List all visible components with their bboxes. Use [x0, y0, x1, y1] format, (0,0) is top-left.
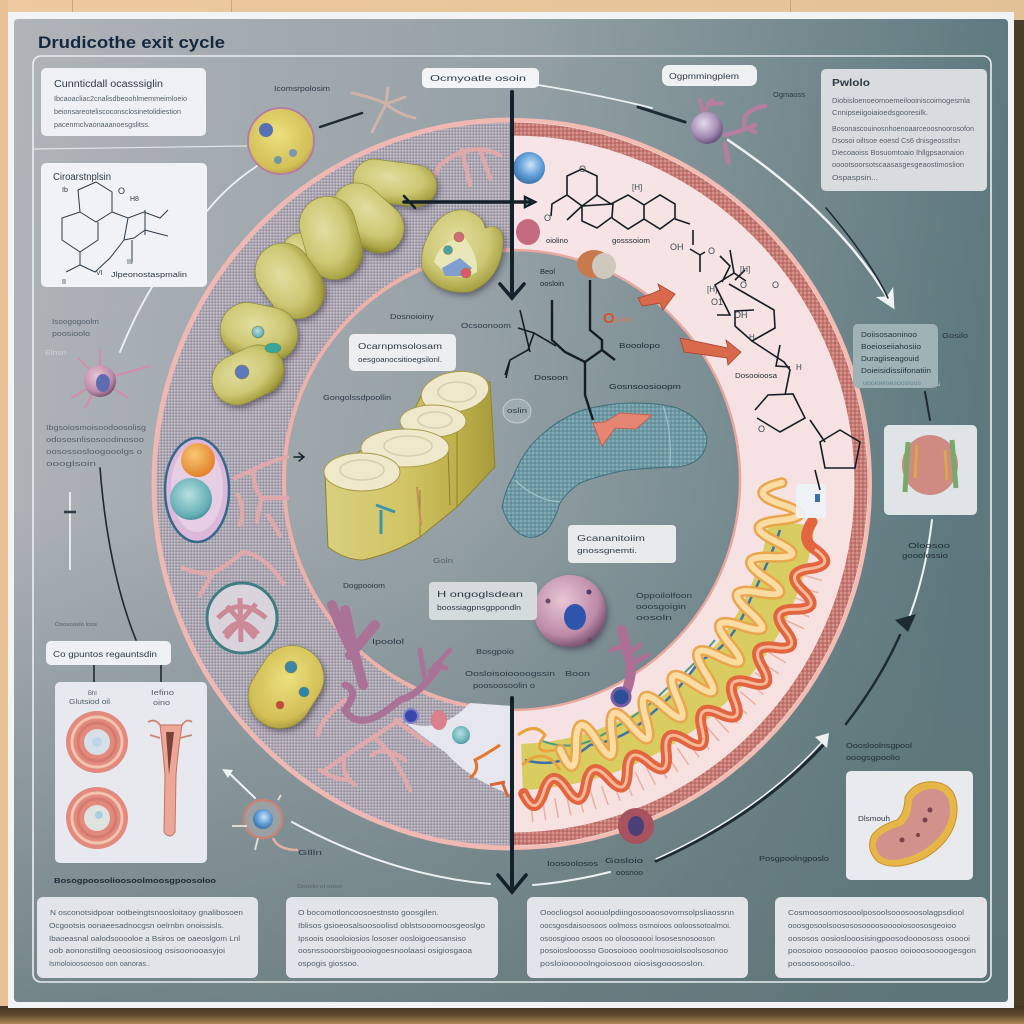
floating labels: Ipoolol	[372, 639, 405, 646]
text box: lower left-centre note: boossiagpnsgppondln	[437, 605, 521, 612]
text box: top left note: beionsareoteliscoconsclosinetolidiestion	[54, 109, 181, 116]
text box: right side panel: Duragiiseagouid	[861, 356, 919, 363]
blue and green streaks	[525, 530, 780, 763]
bottom text box 2: Ipsoois osooloiosios lososer oosloigoeosansiso	[298, 936, 466, 943]
text box: lower left title: Co gpuntos regauntsdin	[53, 650, 157, 659]
text box: lower left-centre note	[429, 582, 537, 620]
benzene ring diagram: II	[62, 279, 66, 286]
organelle: top potato	[350, 156, 440, 210]
panel: stomach: Dlsmouh	[858, 816, 890, 823]
floating labels: Gosloio	[605, 858, 643, 865]
organelle: tall potato	[293, 190, 369, 286]
structure atom labels: O	[708, 246, 715, 256]
floating labels: Icomsrpolosim	[274, 86, 330, 93]
text box: lower left title	[46, 641, 171, 665]
bottom text box 2: ospogis giossoo.	[298, 961, 359, 968]
yellow layered cylinders	[324, 366, 495, 560]
text box: top right panel	[821, 69, 987, 191]
inner orange fold	[560, 483, 799, 767]
chemical structure: right ring	[544, 164, 860, 490]
floating labels: Oloosoo	[908, 543, 950, 550]
purple cell sphere with blue nucleus	[534, 575, 606, 647]
purple neuron, lower left of ring	[332, 605, 450, 723]
floating labels: Dogpooiom	[343, 583, 385, 590]
icon: uterine tube	[148, 721, 192, 836]
floating labels: oooglsoin	[46, 461, 96, 468]
floating labels: Ogmaoss	[773, 92, 806, 99]
structure atom labels	[544, 164, 802, 434]
floating labels: Oosloisoioooogssin	[465, 671, 555, 678]
cylinder top: second	[361, 429, 449, 467]
teal kidney organ	[502, 403, 707, 537]
bottom text box 3: posloiooooolngoiosooo oiosisgooososlon.	[540, 961, 705, 968]
bottom text box 2: O bocomotloncoosoestnsto goosgilen.	[298, 910, 439, 917]
text box: top left note: Cunnticdall ocasssiglin	[54, 79, 163, 90]
organelle: mid potato	[244, 232, 336, 330]
panel: ring cross sections and tube: Iefino	[151, 690, 174, 697]
small pale tube at wave top	[796, 484, 826, 518]
organelle: small potato	[277, 227, 331, 287]
fringe behind folds	[530, 565, 816, 812]
bottom text box 1: Ismoloioosoosoo oon oanoras..	[49, 961, 150, 968]
floating labels: Goln	[433, 558, 453, 565]
text box: centre small note	[349, 334, 456, 371]
floating labels: poosioolo	[52, 331, 90, 338]
benzene ring diagram: Ib	[62, 187, 68, 194]
text box: top right panel: Pwlolo	[832, 78, 870, 89]
organelle: lower potato	[236, 634, 336, 740]
bottom text box 4: oososos oosioslooosisingpoosodoooososs osoooi	[788, 936, 971, 943]
bottom text box 3: posoioslooosso Goosoiooo ooolmosoiolsoolsosonoo	[540, 948, 728, 955]
purple neuron top right	[691, 100, 765, 162]
oval cell with orange and teal nuclei	[165, 438, 229, 542]
curved flow arrows	[100, 85, 932, 885]
cylinder inclusions	[376, 505, 395, 534]
bottom text box 3: Ooocliogsol aoouolpdiingosooaosovomsolpsliaossnn	[540, 910, 734, 917]
floating labels: Bosogpoosolioosoolmoosgpoosoloo	[54, 878, 216, 885]
arrow: to stomach label	[656, 742, 826, 861]
copper arrow lower	[680, 338, 741, 365]
cylinder top: back	[418, 366, 492, 418]
small side label: Gosilo	[942, 333, 968, 340]
organelle: potato with teal dot	[215, 297, 303, 367]
floating labels: Posgpoolngposlo	[759, 856, 829, 863]
pill: top centre: Ocmyoatle osoin	[430, 74, 526, 83]
text box: top right panel: Ospaspsin...	[832, 175, 878, 182]
text box: chemical structure: Jlpeonostaspmalin	[111, 272, 187, 279]
floating labels: ooogsgpoolio	[846, 755, 900, 762]
floating labels: oosossosloogooolgs o	[46, 449, 142, 456]
structure atom labels: [H]	[632, 183, 642, 192]
bottom text box 4: poosoioo oosooooioo paosoo ooiooosoooogesgon	[788, 948, 976, 955]
text box: lower centre note: Gcananitoiim	[577, 534, 645, 543]
floating labels: Dooslo ol oooo	[297, 884, 342, 890]
arrow: down bottom	[498, 698, 526, 892]
floating labels: Beol	[540, 269, 555, 276]
text box: chemical structure: Ciroarstnplsin	[53, 172, 111, 183]
structure atom labels: O	[772, 280, 779, 290]
bottom text box 4: posoosooosoiloo..	[788, 961, 855, 968]
floating labels: Gllln	[298, 850, 322, 857]
structure atom labels: O	[544, 213, 551, 223]
floating labels: Ocsoonoom	[461, 323, 511, 330]
arrow: kidney down	[905, 520, 932, 628]
floating labels: Isoogogoolm	[52, 319, 99, 326]
panel: ring cross sections and tube: oino	[153, 700, 170, 707]
pink cell cluster at centre top	[516, 219, 540, 245]
floating labels: oiolino	[546, 238, 568, 245]
floating labels: Elnsn	[45, 350, 66, 357]
floating labels: Ibgsoiosmoisoodoosolisg	[46, 425, 146, 432]
copper plug	[577, 250, 616, 279]
icon: ring cross section top	[66, 711, 128, 773]
structure atom labels: H	[796, 363, 802, 372]
blue sphere at top of ring	[513, 152, 545, 184]
structure atom labels: OH	[734, 310, 748, 320]
benzene ring diagram: VI	[96, 270, 103, 277]
text box: top right panel: Diecoaoiss Bosuomtoaio Ihllgpsaonaion	[832, 150, 964, 157]
arrow: neuron to side panel	[728, 140, 892, 305]
floating labels: oslin	[507, 408, 527, 415]
small label bubble	[503, 399, 531, 423]
floating labels: Ososooslo loos	[55, 622, 97, 628]
text box: top left note: Ibcaoacliac2cnalisdbeoohlmemmeimloeio	[54, 96, 187, 103]
benzene ring diagram: O	[118, 186, 125, 196]
pill: top right: Ogpmmingplem	[669, 72, 739, 81]
arrow: bottom left sweep	[292, 822, 490, 884]
bottom text box 1: oob aononstillng oeoosiosioog osisoonooasyjoi	[49, 948, 226, 955]
benzene ring diagram: H8	[130, 196, 139, 203]
organelle: cut potato with inclusions	[422, 210, 503, 292]
arrow: left vertical	[100, 468, 136, 640]
arrow: down to stomach	[846, 635, 900, 724]
bottom text box 2: Iblisos gsioeosalsoosoolisd oblstsooomoosgeoslgo	[298, 923, 485, 930]
structure atom labels: [H]	[707, 285, 717, 294]
floating labels	[45, 86, 950, 890]
yellow olive organelle chain	[204, 156, 503, 740]
panel: stomach	[846, 771, 973, 880]
bottom text box 1: Ibaoeasnal oalodsooooloe a Bsiros oe oaeoslgom Lnl	[49, 936, 240, 943]
structure atom labels: H	[749, 333, 755, 342]
structure atom labels: O	[758, 424, 765, 434]
text box: lower left-centre note: H ongoglsdean	[437, 590, 523, 599]
chemical structure: centre	[505, 280, 632, 420]
circular cycle ring	[154, 120, 870, 848]
copper arrows	[638, 284, 741, 365]
text box: centre small note: Ocarnpmsolosam	[358, 342, 442, 351]
rim cell bottom	[618, 808, 654, 844]
bottom text box 3: oocsgosdaisoosoos oolmoss osmoioos ooloossotoalmoi.	[540, 923, 731, 930]
text box: top left note	[41, 68, 206, 136]
icon: ring cross section bottom	[66, 787, 128, 849]
title: Drudicothe exit cycle	[38, 34, 225, 52]
floating labels: gooolossio	[902, 553, 948, 560]
structure atom labels: OH	[670, 242, 684, 252]
copper arrow upper	[638, 284, 675, 310]
ochre round cell	[248, 108, 314, 174]
arrow: panel to kidney	[925, 392, 930, 420]
pink star neuron left	[72, 350, 150, 408]
floating labels: Oppoilolfoon	[636, 593, 692, 600]
arrow: pill to neuron	[538, 85, 652, 108]
floating labels: poosoosoolin o	[473, 683, 535, 690]
chemical structure: centre: guan	[614, 315, 632, 324]
text box: right side panel	[853, 324, 940, 388]
arrow: small mark at inner ring	[294, 453, 304, 461]
structure atom labels: [H]	[740, 265, 750, 274]
intestinal folds on right ring	[518, 483, 825, 812]
cylinder top: front	[324, 453, 400, 491]
orange twisted ribbon on kidney	[593, 413, 652, 446]
yellow mucosa band	[522, 523, 792, 767]
bottom text box 3: osoosgiooo osoos oo oloosooooi lososesnosooson	[540, 936, 715, 943]
ring left half: stippled tissue	[152, 118, 510, 850]
text box: top right panel: Dsosoi oiltsoe eoesd Cs6 dnisgeosstlsn	[832, 138, 960, 145]
organelle: kidney potato	[322, 173, 414, 263]
structure atom labels: O1	[711, 297, 723, 307]
benzene ring diagram	[62, 182, 168, 286]
floating labels: odososnlisosoodinosoo	[46, 437, 144, 444]
floating labels: Ooosloolnsgpool	[846, 743, 913, 750]
arrow: down top	[500, 92, 524, 298]
bottom text box 2: oosnssooorsbigoooiogoesnoolaasi osigiosgaoa	[298, 948, 472, 955]
floating labels: Gosnsoosioopm	[609, 384, 681, 391]
panel: ring cross sections and tube: Bhl	[88, 691, 97, 697]
pale patch with floating cells	[405, 703, 512, 797]
floating labels: oosloin	[540, 281, 564, 288]
arrow: horizontal	[404, 196, 535, 208]
text box: top right panel: ooootsoorsotscaasasgesgeaostimoslion	[832, 162, 964, 169]
text box: centre small note: oesgoanocsitioegsilonl.	[358, 357, 442, 364]
benzene ring diagram: III	[127, 259, 133, 266]
text box: right side panel: Doiisosaoninoo	[861, 332, 917, 339]
main black arrows	[294, 92, 535, 892]
slider glyph left	[64, 492, 76, 570]
text box: top right panel: Diobisloenoeomoemeilooiniscoimogesmla	[832, 98, 970, 105]
text box: lower centre note: gnossgnemti.	[577, 548, 637, 555]
cylinder top: middle	[400, 405, 466, 437]
kidney diagram panel	[884, 425, 977, 515]
text box: chemical structure	[41, 163, 207, 287]
arrow: to left panel	[228, 772, 255, 798]
text box: top right panel: Bosonascouinosnhoenoaarceoosnoorosofon	[832, 126, 974, 133]
floating labels: Dosoon	[534, 375, 568, 382]
bottom text box 3	[527, 897, 748, 978]
floating labels: Booolopo	[619, 343, 660, 350]
text box: right side panel: uooioeioesoosioos	[863, 381, 921, 387]
orange oxygen label: O	[603, 310, 615, 327]
floating labels: Ioosoolosos	[547, 861, 599, 868]
text box: top left note: pacenrnclvaonaaanoesgslitss.	[54, 122, 150, 129]
structure atom labels: O	[579, 164, 586, 174]
panel: ring cross sections and tube: Glutsiod oil	[69, 699, 111, 706]
floating labels: Bosgpoio	[476, 649, 514, 656]
pink branching vessels, left ring	[183, 149, 500, 790]
connector stems	[94, 665, 161, 682]
cylinder body	[325, 382, 495, 560]
pill: top right	[662, 65, 757, 86]
text box: top right panel: Cnnipseiigoiaioedsgooresilk.	[832, 110, 928, 117]
bottom text box 4: ooosgosoolsoosososoooosooooiosoososgeoioo	[788, 923, 956, 930]
floating labels: oosnoo	[616, 870, 643, 877]
pale star neuron top	[352, 88, 415, 132]
bottom text box 1: Ocgootsis oonaeesadnocgsn oelrnbn onoissisls.	[49, 923, 224, 930]
pill: top centre	[422, 68, 539, 88]
floating labels: Dosnoioiny	[390, 314, 435, 321]
floating labels: Boon	[565, 671, 590, 678]
organelle: potato with blue dot	[204, 337, 292, 413]
structure atom labels: O	[740, 280, 747, 290]
floating labels: Dosooioosa	[735, 373, 777, 380]
bottom text box 2	[286, 897, 498, 978]
bottom text box 1	[37, 897, 258, 978]
knotted fold left end	[518, 728, 560, 770]
bottom text box 4: Cosmoosoomosooolposoolsooosoosolagpsdiool	[788, 910, 965, 917]
panel: ring cross sections and tube	[55, 682, 207, 863]
text box: right side panel: Doieisidissiifonatiin	[861, 368, 931, 375]
outer red fold	[524, 522, 825, 806]
small eye cell bottom	[232, 795, 298, 850]
floating labels: Gongolssdpoollin	[323, 395, 391, 402]
floating labels: oosoln	[636, 615, 672, 622]
floating labels: ooosgoigin	[636, 604, 686, 611]
text box: lower centre note	[568, 525, 676, 563]
purple neuron, lower right of ring	[612, 630, 648, 706]
ring right half: pale tissue	[514, 118, 872, 850]
round pink-striped cell	[207, 583, 277, 653]
bottom text box 4	[775, 897, 987, 978]
text box: right side panel: Boeioseiiahosiio	[861, 344, 921, 351]
floating labels: gosssoiom	[612, 238, 650, 245]
connector lines	[120, 166, 257, 352]
bottom text box 1: N osconotsidpoar ootbeingtsnoosloitaoy gnalibosoen	[50, 910, 243, 917]
